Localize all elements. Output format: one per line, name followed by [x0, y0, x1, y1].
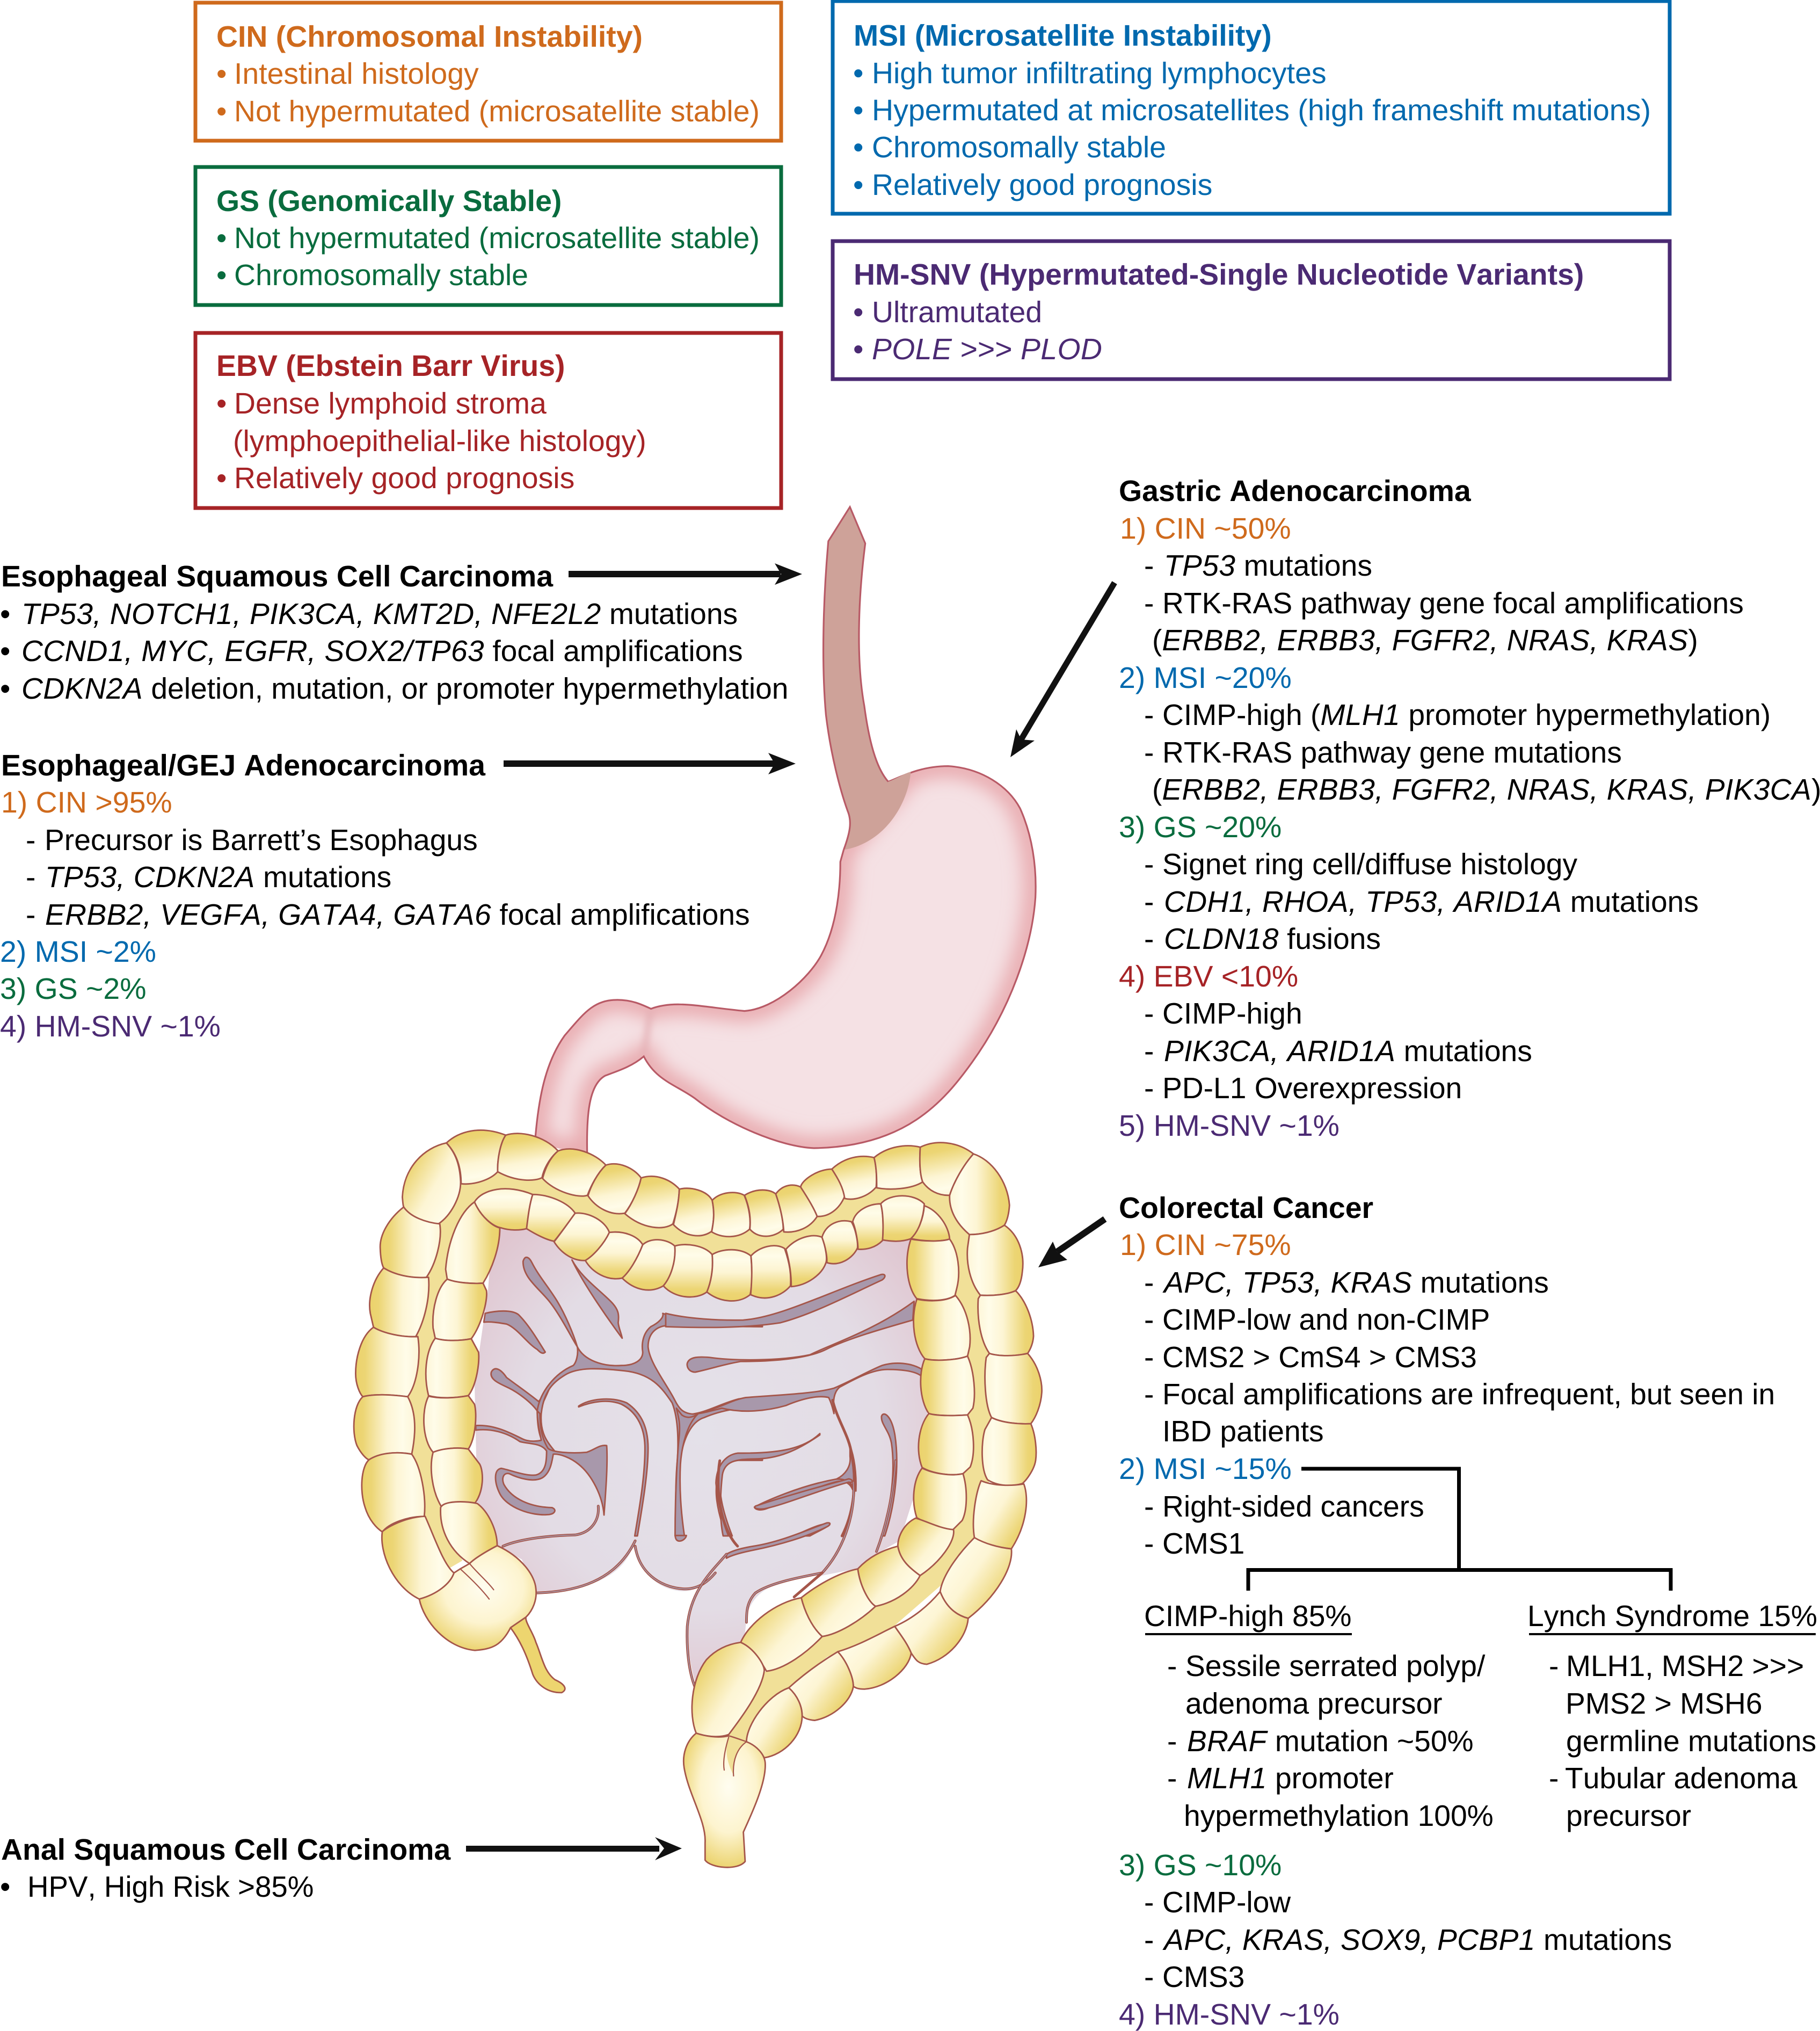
descending and sigmoid outer row — [746, 1481, 1027, 1758]
text block: colorectal cancer: - — [1144, 1527, 1154, 1560]
colon haustra, lower section — [382, 1481, 1027, 1867]
panel: CIN definition — [195, 3, 781, 141]
rectum and anal canal — [683, 1733, 765, 1867]
text block: colorectal cancer: - — [1144, 1377, 1154, 1411]
transverse colon outer row, left part — [447, 1130, 750, 1237]
arrow: to esophagus — [569, 563, 802, 585]
panel: EBV definition: Dense lymphoid stroma — [234, 387, 547, 420]
text block: gastric adenocarcinoma: - — [1144, 1034, 1154, 1068]
panel: HM-SNV definition: • — [853, 332, 863, 366]
panel: MSI definition: • — [853, 93, 863, 127]
panel: MSI definition: • — [853, 168, 863, 201]
panel: CIN definition: • — [216, 57, 227, 90]
text block: gastric adenocarcinoma: TP53 mutations — [1164, 549, 1372, 582]
cecum — [419, 1546, 536, 1650]
text block: gastric adenocarcinoma — [1119, 474, 1820, 1142]
text block: esophageal squamous cell carcinoma: TP53, NOTCH1, PIK3CA, KMT2D, NFE2L2 mutations — [21, 597, 738, 630]
text block: colorectal cancer: APC, KRAS, SOX9, PCBP1 mutations — [1162, 1923, 1672, 1956]
text block: esophageal/GEJ adenocarcinoma: 2) MSI ~2% — [0, 935, 156, 968]
text block: esophageal squamous cell carcinoma: • — [0, 672, 10, 705]
text block: esophageal/GEJ adenocarcinoma: 4) HM-SNV ~1% — [0, 1010, 221, 1043]
text block: esophageal squamous cell carcinoma: • — [0, 597, 10, 630]
text block: esophageal/GEJ adenocarcinoma: ERBB2, VEGFA, GATA4, GATA6 focal amplifications — [45, 898, 750, 931]
panel: GS definition: Chromosomally stable — [234, 258, 528, 292]
text block: colorectal cancer: - — [1144, 1960, 1154, 1993]
panel: MSI definition — [833, 1, 1670, 214]
text block: gastric adenocarcinoma: CIMP-high (MLH1 promoter hypermethylation) — [1162, 698, 1771, 731]
sub-block: Lynch syndrome: MLH1, MSH2 >>> — [1566, 1649, 1804, 1682]
bracket: MSI splits into CIMP-high and Lynch — [1248, 1469, 1671, 1591]
text block: esophageal/GEJ adenocarcinoma: Precursor is Barrett’s Esophagus — [45, 823, 478, 857]
mesentery background — [475, 1224, 929, 1682]
sigmoid inner row — [692, 1518, 953, 1737]
arrow: to stomach — [1010, 583, 1115, 757]
text block: gastric adenocarcinoma: RTK-RAS pathway gene mutations — [1162, 736, 1622, 769]
descending colon outer row — [950, 1154, 1042, 1485]
panel: EBV definition — [195, 333, 781, 508]
transverse colon outer row, right part — [745, 1143, 973, 1236]
ascending colon outer row — [354, 1207, 440, 1532]
text block: colorectal cancer — [1119, 1191, 1775, 2031]
text block: gastric adenocarcinoma: - — [1144, 1071, 1154, 1105]
sub-block: Lynch syndrome — [1527, 1599, 1817, 1832]
text block: gastric adenocarcinoma: (ERBB2, ERBB3, FGFR2, NRAS, KRAS, PIK3CA) — [1152, 773, 1820, 806]
text block: colorectal cancer: IBD patients — [1162, 1415, 1324, 1448]
text block: colorectal cancer: 2) MSI ~15% — [1119, 1452, 1292, 1485]
text block: esophageal/GEJ adenocarcinoma: - — [26, 860, 35, 894]
text block: gastric adenocarcinoma: Signet ring cell/diffuse histology — [1162, 847, 1577, 881]
esophagus — [824, 507, 911, 850]
text block: gastric adenocarcinoma: 2) MSI ~20% — [1119, 661, 1292, 694]
sub-block: CIMP-high: - — [1167, 1761, 1177, 1795]
text block: colorectal cancer: CMS2 > CmS4 > CMS3 — [1162, 1340, 1477, 1374]
text block: gastric adenocarcinoma: CDH1, RHOA, TP53, ARID1A mutations — [1164, 885, 1699, 918]
panel: EBV definition: EBV (Ebstein Barr Virus) — [216, 349, 565, 382]
appendix — [511, 1616, 565, 1693]
sub-block: CIMP-high: adenoma precursor — [1185, 1687, 1443, 1720]
text block: gastric adenocarcinoma: CIMP-high — [1162, 997, 1302, 1030]
transverse colon inner row, left part — [475, 1189, 752, 1301]
text block: esophageal/GEJ adenocarcinoma: 1) CIN >95% — [1, 786, 172, 819]
colon haustra, upper right — [745, 1143, 1042, 1530]
text block: esophageal/GEJ adenocarcinoma: TP53, CDKN2A mutations — [45, 860, 391, 894]
arrow: to gastroesophageal junction — [504, 753, 796, 774]
text block: gastric adenocarcinoma: CLDN18 fusions — [1164, 922, 1381, 955]
sub-block: Lynch syndrome: precursor — [1566, 1799, 1691, 1832]
small bowel, lower section — [503, 1461, 896, 1688]
small bowel, upper left — [476, 1257, 762, 1536]
sub-block: Lynch syndrome: PMS2 > MSH6 — [1566, 1687, 1763, 1720]
text block: colorectal cancer: CMS3 — [1162, 1960, 1244, 1993]
transverse colon inner row, right part — [751, 1196, 950, 1298]
panel: MSI definition: Chromosomally stable — [872, 130, 1166, 164]
illustration: small and large intestine — [354, 1130, 1042, 1867]
panel: CIN definition: Intestinal histology — [234, 57, 479, 90]
text block: anal squamous cell carcinoma: HPV, High Risk >85% — [27, 1870, 314, 1903]
text block: esophageal squamous cell carcinoma — [0, 560, 788, 705]
illustration: esophagus and stomach — [535, 507, 1036, 1156]
corner of hepatic flexure — [402, 1143, 461, 1224]
text block: gastric adenocarcinoma: - — [1144, 586, 1154, 620]
sub-block: Lynch syndrome: Tubular adenoma — [1565, 1761, 1797, 1795]
sub-block: CIMP-high: Sessile serrated polyp/ — [1185, 1649, 1486, 1682]
text block: gastric adenocarcinoma: - — [1144, 997, 1154, 1030]
cecal folds — [460, 1564, 493, 1599]
text block: anal squamous cell carcinoma — [0, 1833, 451, 1903]
text block: esophageal squamous cell carcinoma: • — [0, 634, 10, 668]
sub-block: Lynch syndrome: germline mutations — [1566, 1724, 1816, 1758]
text block: gastric adenocarcinoma: PD-L1 Overexpression — [1162, 1071, 1462, 1105]
text block: gastric adenocarcinoma: - — [1144, 885, 1154, 918]
panel: EBV definition: • — [216, 461, 227, 495]
text block: colorectal cancer: - — [1144, 1303, 1154, 1336]
colon haustra, upper left — [354, 1130, 752, 1532]
panel: MSI definition: • — [853, 56, 863, 90]
text block: gastric adenocarcinoma: PIK3CA, ARID1A mutations — [1164, 1034, 1532, 1068]
text block: gastric adenocarcinoma: - — [1144, 847, 1154, 881]
text block: colorectal cancer: Focal amplifications are infrequent, but seen in — [1162, 1377, 1775, 1411]
text block: gastric adenocarcinoma: (ERBB2, ERBB3, FGFR2, NRAS, KRAS) — [1152, 623, 1698, 657]
text block: gastric adenocarcinoma: - — [1144, 549, 1154, 582]
text block: gastric adenocarcinoma: RTK-RAS pathway gene focal amplifications — [1162, 586, 1744, 620]
panel: CIN definition: • — [216, 95, 227, 128]
panel: HM-SNV definition: Ultramutated — [872, 295, 1042, 329]
text block: gastric adenocarcinoma: - — [1144, 922, 1154, 955]
panel: EBV definition: Relatively good prognosis — [234, 461, 574, 495]
text block: esophageal/GEJ adenocarcinoma: - — [26, 898, 35, 931]
panel: MSI definition: MSI (Microsatellite Instability) — [854, 19, 1272, 52]
text block: colorectal cancer: APC, TP53, KRAS mutations — [1162, 1266, 1549, 1299]
panel: CIN definition: Not hypermutated (microsatellite stable) — [234, 95, 760, 128]
text block: colorectal cancer: CIMP-low — [1162, 1885, 1291, 1919]
panel: EBV definition: (lymphoepithelial-like histology) — [233, 424, 646, 458]
sub-block: CIMP-high: - — [1167, 1724, 1177, 1758]
text block: colorectal cancer: - — [1144, 1923, 1154, 1956]
text block: esophageal/GEJ adenocarcinoma: 3) GS ~2% — [0, 972, 146, 1005]
arrow: to anus — [466, 1837, 682, 1860]
panel: HM-SNV definition: POLE >>> PLOD — [872, 332, 1102, 366]
sub-block: Lynch syndrome: - — [1549, 1761, 1559, 1795]
text block: esophageal squamous cell carcinoma: CDKN2A deletion, mutation, or promoter hypermethylation — [21, 672, 788, 705]
text block: gastric adenocarcinoma: 5) HM-SNV ~1% — [1119, 1109, 1339, 1142]
panel: HM-SNV definition: • — [853, 295, 863, 329]
text block: colorectal cancer: - — [1144, 1885, 1154, 1919]
sub-block: CIMP-high — [1144, 1599, 1494, 1832]
text block: colorectal cancer: 4) HM-SNV ~1% — [1119, 1998, 1339, 2031]
mesocolon band — [420, 1183, 981, 1738]
panel: GS definition: • — [216, 258, 227, 292]
ascending colon lower segments — [382, 1502, 497, 1599]
text block: gastric adenocarcinoma: - — [1144, 736, 1154, 769]
panel: GS definition: Not hypermutated (microsatellite stable) — [234, 221, 760, 255]
descending colon inner row — [907, 1239, 974, 1530]
text block: colorectal cancer: Right-sided cancers — [1162, 1490, 1424, 1523]
text block: esophageal/GEJ adenocarcinoma — [0, 749, 750, 1043]
text block: esophageal squamous cell carcinoma: Esophageal Squamous Cell Carcinoma — [1, 560, 554, 593]
sub-block: CIMP-high: BRAF mutation ~50% — [1187, 1724, 1474, 1758]
text block: colorectal cancer: CIMP-low and non-CIMP — [1162, 1303, 1490, 1336]
panel: MSI definition: Relatively good prognosis — [872, 168, 1212, 201]
panel: HM-SNV definition — [833, 241, 1670, 379]
sub-block: CIMP-high: - — [1167, 1649, 1177, 1682]
band wedge between rectal folds — [726, 1736, 746, 1775]
panel: MSI definition: • — [853, 130, 863, 164]
panel: MSI definition: High tumor infiltrating lymphocytes — [872, 56, 1327, 90]
panel: GS definition: GS (Genomically Stable) — [216, 184, 562, 217]
rectal folds — [724, 1737, 746, 1776]
text block: gastric adenocarcinoma: 4) EBV <10% — [1119, 960, 1298, 993]
text block: gastric adenocarcinoma: - — [1144, 698, 1154, 731]
panel: CIN definition: CIN (Chromosomal Instability) — [216, 20, 643, 53]
text block: anal squamous cell carcinoma: Anal Squamous Cell Carcinoma — [1, 1833, 451, 1866]
panel: GS definition — [195, 167, 781, 305]
panel: EBV definition: • — [216, 387, 227, 420]
arrow: to colon — [1038, 1219, 1105, 1267]
text block: colorectal cancer: - — [1144, 1340, 1154, 1374]
stomach and duodenum — [535, 766, 1036, 1156]
text block: colorectal cancer: CMS1 — [1162, 1527, 1244, 1560]
sub-block: Lynch syndrome: Lynch Syndrome 15% — [1527, 1599, 1817, 1633]
text block: esophageal squamous cell carcinoma: CCND1, MYC, EGFR, SOX2/TP63 focal amplifications — [21, 634, 743, 668]
sub-block: Lynch syndrome: - — [1549, 1649, 1559, 1682]
sub-block: CIMP-high: CIMP-high 85% — [1144, 1599, 1351, 1633]
text block: colorectal cancer: Colorectal Cancer — [1119, 1191, 1373, 1224]
text block: colorectal cancer: 1) CIN ~75% — [1120, 1228, 1291, 1261]
panel: GS definition: • — [216, 221, 227, 255]
text block: gastric adenocarcinoma: Gastric Adenocarcinoma — [1119, 474, 1472, 507]
text block: gastric adenocarcinoma: 3) GS ~20% — [1119, 810, 1282, 844]
text block: gastric adenocarcinoma: 1) CIN ~50% — [1120, 512, 1291, 545]
text block: anal squamous cell carcinoma: • — [0, 1870, 10, 1903]
panel: MSI definition: Hypermutated at microsatellites (high frameshift mutations) — [872, 93, 1651, 127]
text block: colorectal cancer: 3) GS ~10% — [1119, 1848, 1282, 1882]
sub-block: CIMP-high: hypermethylation 100% — [1184, 1799, 1494, 1832]
panel: HM-SNV definition: HM-SNV (Hypermutated-Single Nucleotide Variants) — [854, 258, 1584, 291]
small bowel, upper right — [666, 1274, 922, 1536]
text block: esophageal/GEJ adenocarcinoma: - — [26, 823, 35, 857]
ascending colon inner row — [424, 1202, 500, 1507]
text block: colorectal cancer: - — [1144, 1266, 1154, 1299]
text block: colorectal cancer: - — [1144, 1490, 1154, 1523]
sub-block: CIMP-high: MLH1 promoter — [1187, 1761, 1394, 1795]
text block: esophageal/GEJ adenocarcinoma: Esophageal/GEJ Adenocarcinoma — [1, 749, 486, 782]
